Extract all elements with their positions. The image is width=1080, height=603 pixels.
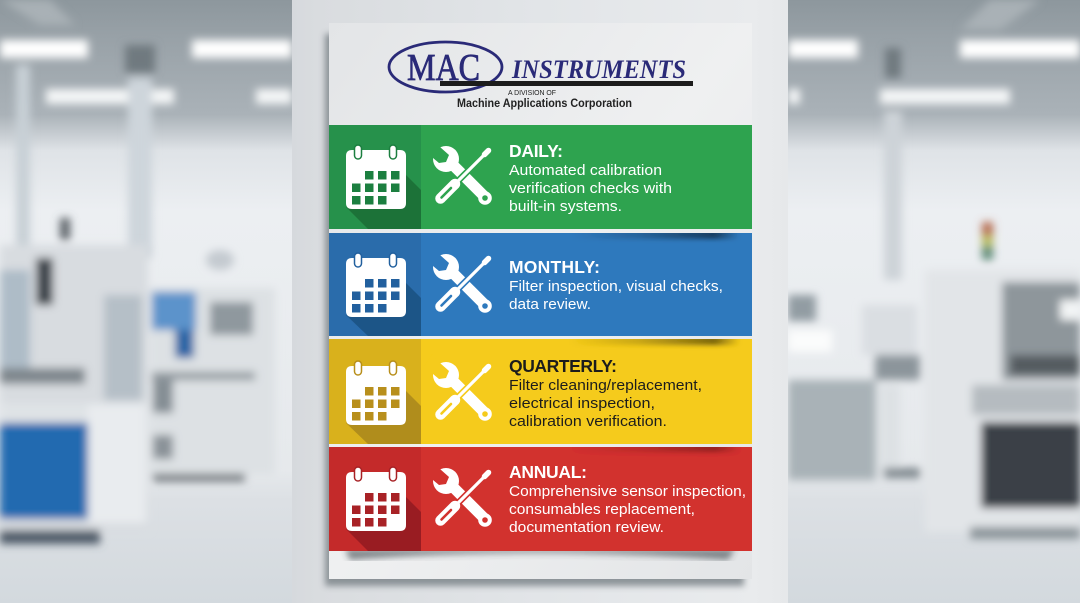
icon: calendar [346, 361, 406, 425]
right rear machine [788, 380, 876, 480]
left front machine [0, 245, 148, 530]
logo corporation: Machine Applications Corporation [457, 98, 632, 110]
icon: calendar [346, 145, 406, 209]
logo division line: A DIVISION OF [508, 88, 556, 97]
quarterly text: Filter cleaning/replacement, [509, 378, 702, 394]
monthly text: MONTHLY: [509, 257, 600, 277]
band: annual [329, 444, 752, 560]
band: daily [329, 125, 752, 229]
quarterly text: electrical inspection, [509, 396, 655, 412]
icon: calendar [346, 467, 406, 531]
quarterly text: calibration verification. [509, 414, 667, 430]
logo oval [389, 42, 502, 92]
daily text: verification checks with [509, 181, 672, 197]
daily text: built-in systems. [509, 199, 622, 215]
annual text: consumables replacement, [509, 502, 695, 518]
icon: wrench and screwdriver [424, 354, 492, 421]
quarterly text: QUARTERLY: [509, 356, 617, 376]
left rear machine [150, 288, 275, 475]
logo MAC: MAC [407, 47, 480, 89]
annual text: Comprehensive sensor inspection, [509, 484, 746, 500]
logo [389, 42, 693, 110]
icon: wrench and screwdriver [424, 246, 492, 313]
right front machine [925, 270, 1080, 532]
band: monthly [329, 230, 752, 336]
icon: wrench and screwdriver [424, 138, 492, 205]
annual text: documentation review. [509, 520, 664, 536]
icon: wrench and screwdriver [424, 460, 492, 527]
backing panel [292, 0, 788, 603]
band: quarterly [329, 336, 752, 444]
logo INSTRUMENTS: INSTRUMENTS [511, 55, 686, 84]
daily text: DAILY: [509, 141, 563, 161]
monthly text: Filter inspection, visual checks, [509, 279, 723, 295]
annual text: ANNUAL: [509, 462, 587, 482]
monthly text: data review. [509, 297, 591, 313]
logo rule [440, 81, 693, 86]
poster [325, 23, 752, 586]
icon: calendar [346, 253, 406, 317]
daily text: Automated calibration [509, 163, 662, 179]
